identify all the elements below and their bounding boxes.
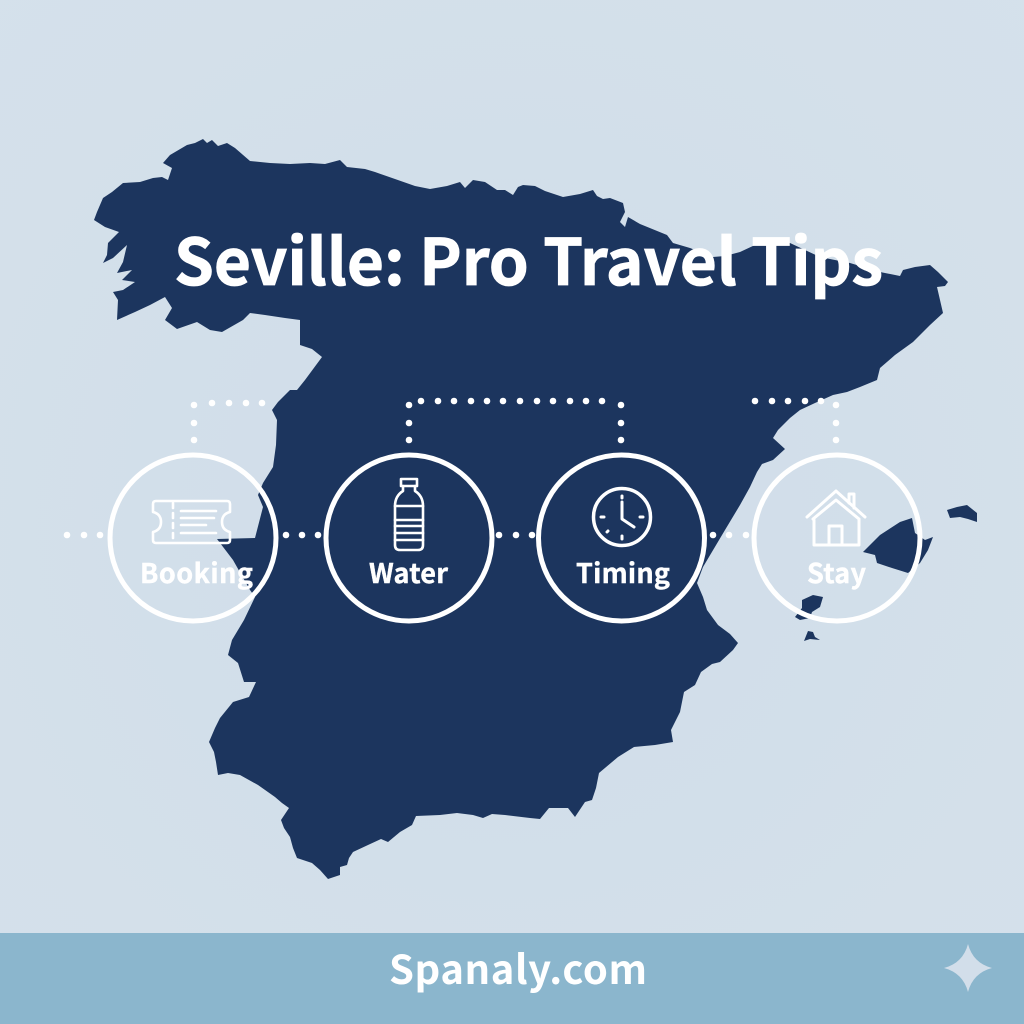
Menorca [947, 505, 977, 522]
Mallorca [863, 518, 933, 573]
dotted connectors [64, 398, 839, 538]
footer text: Spanaly.com [389, 938, 647, 996]
label: Booking: Booking [140, 552, 253, 591]
icon: clock [594, 488, 650, 546]
icon: water bottle [395, 479, 423, 550]
mainland silhouette [94, 139, 948, 879]
tip: Stay [754, 455, 920, 621]
Formentera [804, 631, 820, 641]
label: Stay: Stay [807, 552, 866, 591]
icon: house [807, 491, 865, 545]
tip: Booking [110, 455, 276, 621]
icon: sparkle [944, 944, 992, 992]
footer band [0, 933, 1024, 1024]
title: Seville: Pro Travel Tips [174, 212, 883, 304]
map of Spain [94, 139, 977, 879]
icon: ticket [153, 501, 230, 543]
tip: Timing [538, 455, 704, 621]
Ibiza [795, 595, 823, 620]
label: Water: Water [369, 552, 448, 591]
tip: Water [326, 455, 492, 621]
label: Timing: Timing [576, 552, 670, 591]
